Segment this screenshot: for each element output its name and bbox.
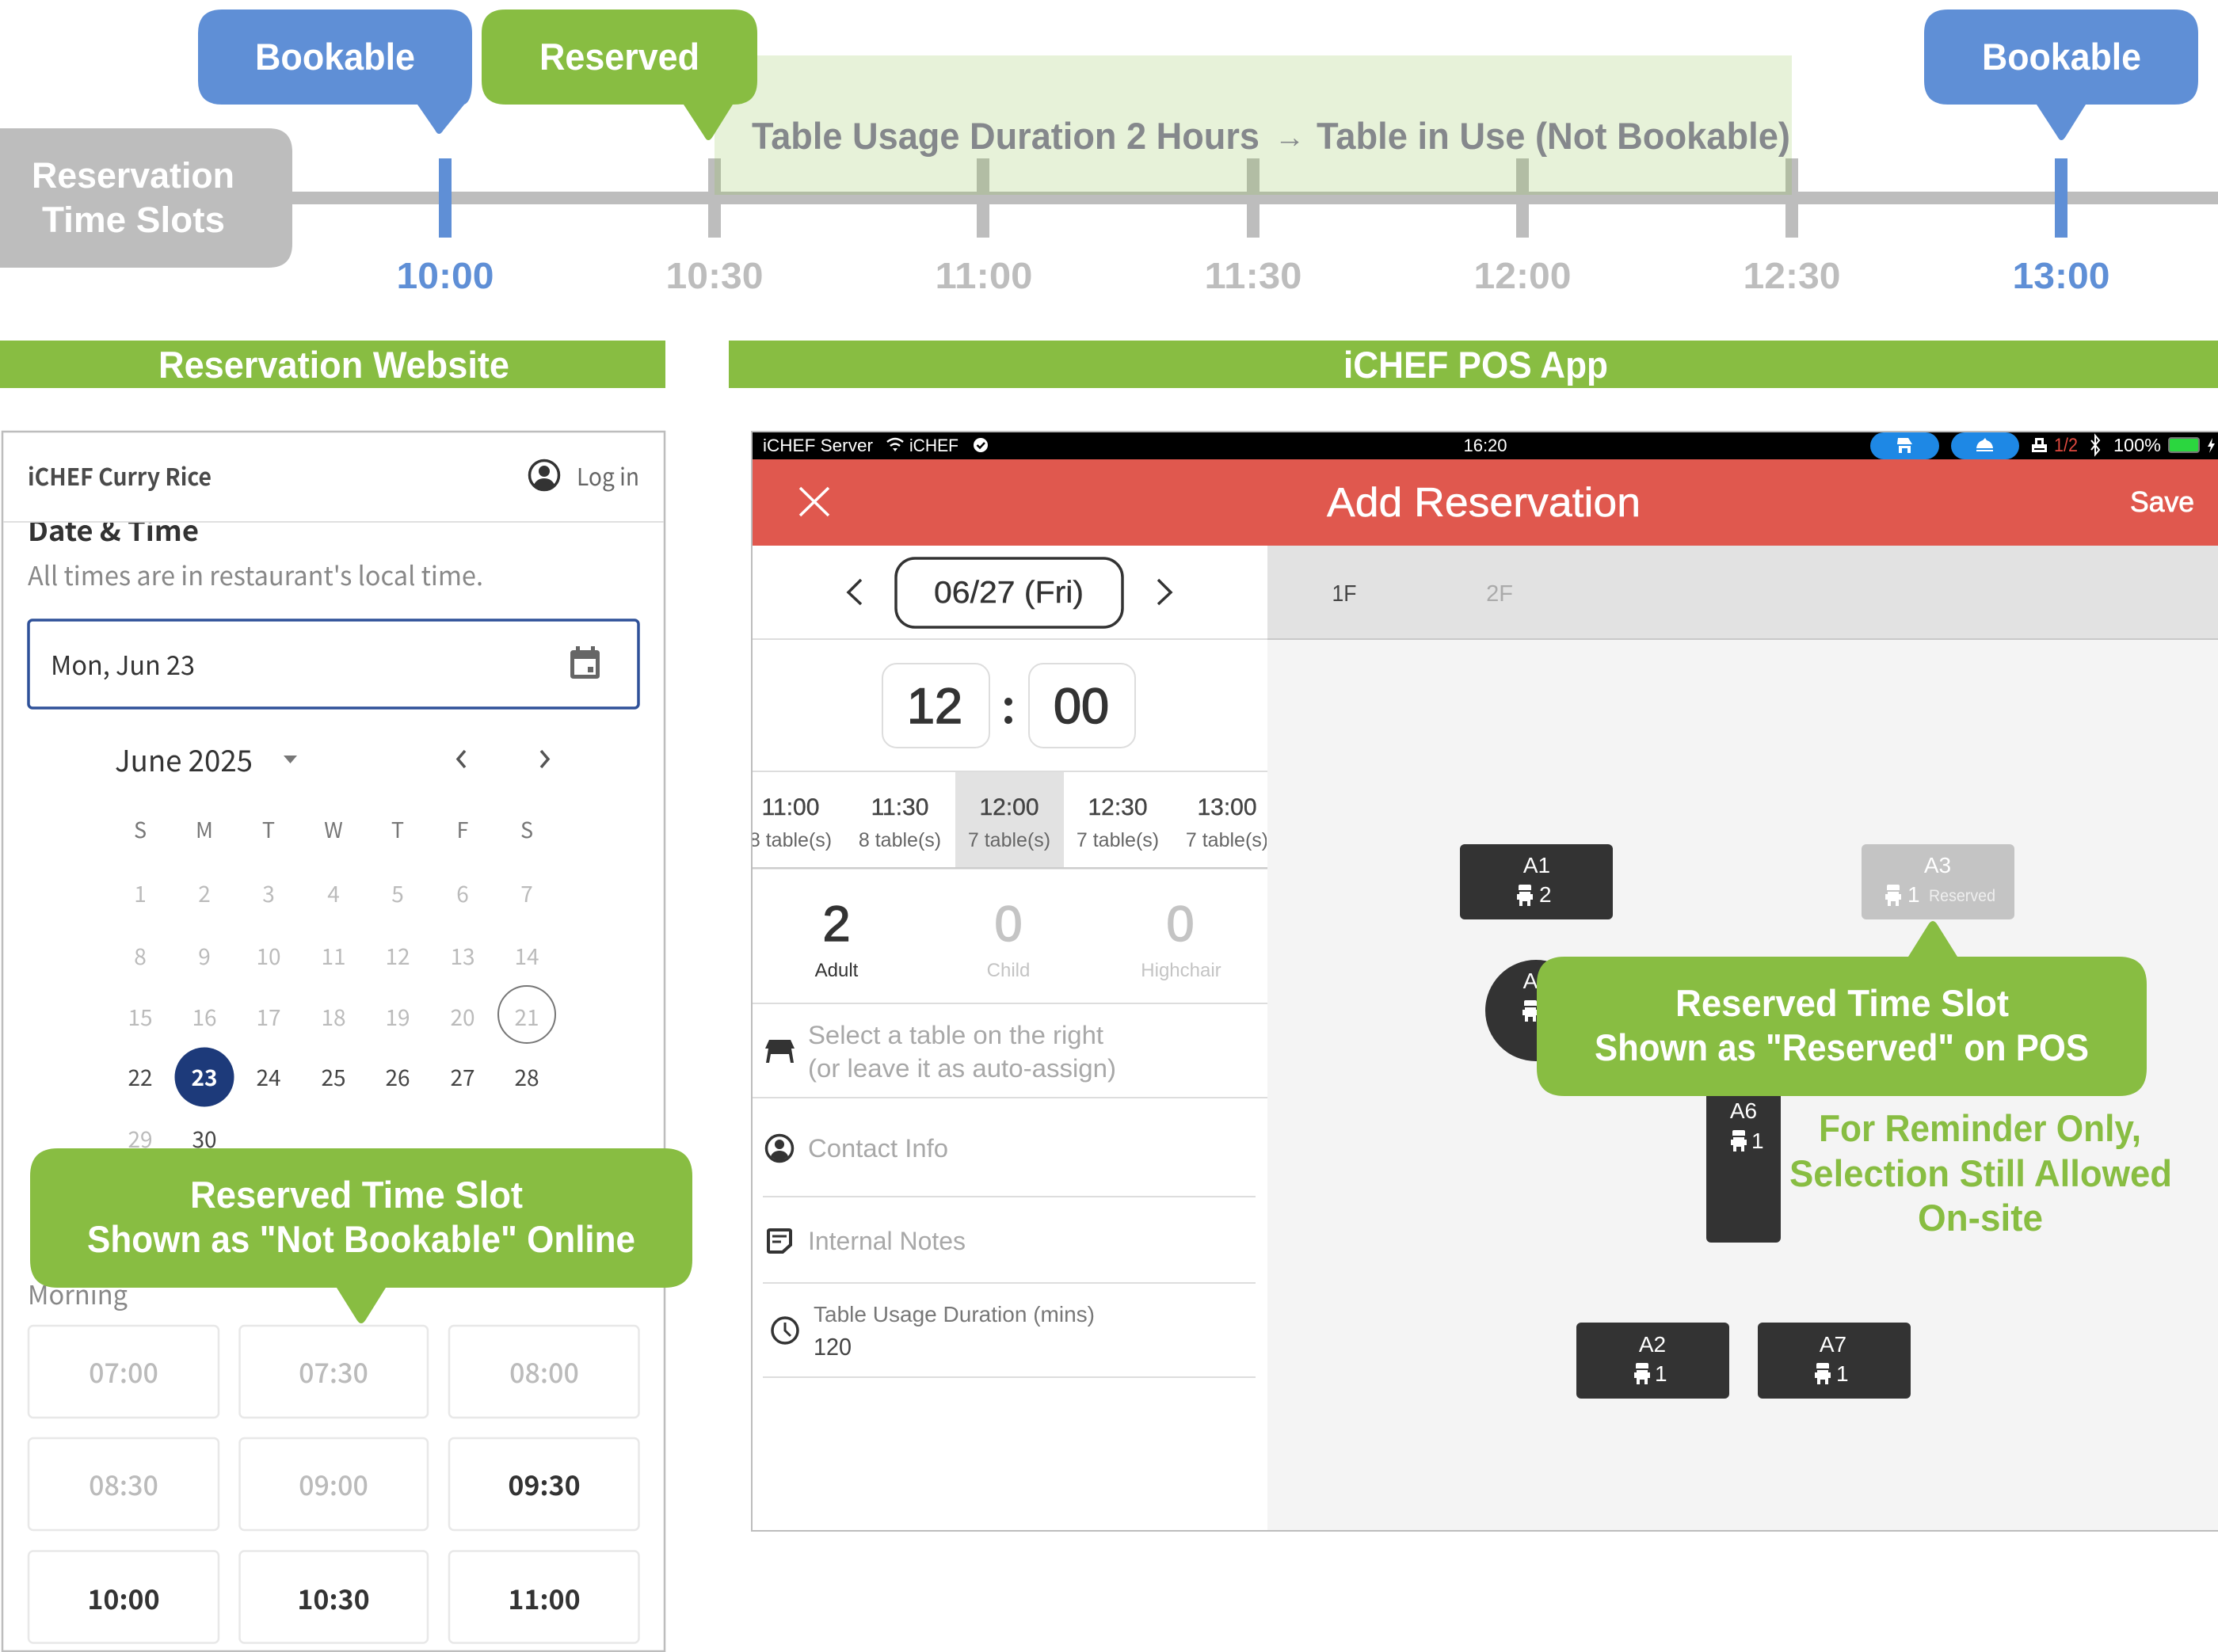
table usage duration band: Table in Use (Not Bookable) — [1317, 115, 1790, 157]
calendar: 30 — [192, 1123, 217, 1155]
table A6 — [1706, 1085, 1781, 1243]
callout: bookable 13:00 — [1924, 10, 2198, 140]
calendar: 25 — [321, 1061, 346, 1093]
time slot table counts: 7 table(s) — [1186, 829, 1268, 851]
callout: not bookable online: Reserved Time Slot — [190, 1174, 523, 1216]
time slot buttons: 11:00 — [508, 1578, 581, 1617]
callout: reserved on POS — [1537, 921, 2147, 1096]
time slot buttons: 08:30 — [89, 1464, 158, 1503]
date input: Mon, Jun 23 — [51, 645, 195, 683]
table round A — [1485, 960, 1587, 1061]
time slot table counts: 7 table(s) — [968, 829, 1050, 851]
heading: reservation website — [0, 341, 665, 388]
date and time heading — [28, 523, 482, 586]
date and time heading: Date & Time — [28, 509, 199, 550]
time slot buttons: 07:00 — [89, 1352, 158, 1391]
time slot buttons: 09:00 — [299, 1464, 368, 1503]
table A3 reserved: 1 — [1907, 882, 1920, 907]
calendar: M — [196, 813, 213, 844]
calendar: 29 — [128, 1123, 153, 1155]
calendar: 4 — [327, 877, 340, 909]
table A7: 1 — [1836, 1361, 1849, 1386]
table selection row — [753, 1021, 1267, 1098]
calendar: 18 — [321, 1001, 346, 1033]
note: for reminder only: Selection Still Allowed — [1789, 1152, 2172, 1194]
note: for reminder only: On-site — [1918, 1197, 2043, 1239]
calendar: 11 — [321, 940, 346, 972]
table usage duration row — [763, 1302, 1256, 1378]
calendar: 17 — [256, 1001, 281, 1033]
table A3 reserved: Reserved — [1929, 887, 1995, 905]
internal notes row: Internal Notes — [808, 1227, 966, 1255]
table A1: 2 — [1539, 882, 1552, 907]
callout: not bookable online — [30, 1148, 692, 1323]
party size: 2 — [822, 896, 851, 952]
time slot table counts: 12:00 — [979, 794, 1039, 820]
table A2: A2 — [1639, 1332, 1666, 1357]
time labels — [396, 255, 2110, 296]
time slot buttons: 09:30 — [508, 1464, 581, 1503]
time slot buttons: 10:30 — [297, 1578, 370, 1617]
heading: reservation website: Reservation Website — [158, 344, 509, 386]
time slot buttons: 08:00 — [509, 1352, 579, 1391]
table A1 — [1460, 844, 1613, 919]
red title bar — [753, 459, 2218, 546]
status bar: 16:20 — [1463, 436, 1507, 455]
time selector — [882, 664, 1135, 748]
calendar: 26 — [385, 1061, 410, 1093]
callout: reserved 10:30: Reserved — [539, 36, 699, 78]
time slot buttons — [29, 1326, 638, 1642]
party size: Child — [987, 960, 1030, 981]
calendar: 24 — [256, 1061, 281, 1093]
table usage duration row: Table Usage Duration (mins) — [814, 1302, 1095, 1327]
calendar: 2 — [198, 877, 211, 909]
label: reservation time slots — [0, 128, 292, 268]
calendar: 5 — [391, 877, 404, 909]
calendar: 8 — [134, 940, 147, 972]
heading: iCHEF POS app — [729, 341, 2218, 388]
date selector — [753, 558, 1267, 640]
website header — [3, 458, 664, 523]
heading: iCHEF POS app: iCHEF POS App — [1343, 344, 1608, 386]
time selector: 00 — [1054, 679, 1109, 734]
status bar — [753, 432, 2218, 459]
time slot buttons: 10:00 — [87, 1578, 160, 1617]
callout: bookable 10:00 — [198, 10, 472, 134]
calendar: June 2025 — [115, 737, 253, 780]
internal notes row — [763, 1227, 1256, 1284]
calendar: 14 — [514, 940, 539, 972]
table A6: 1 — [1751, 1129, 1764, 1153]
time labels: 12:00 — [1473, 255, 1572, 296]
time slot table counts: 12:30 — [1088, 794, 1148, 820]
party size: Adult — [815, 960, 859, 981]
table A3 reserved — [1862, 844, 2014, 919]
red title bar: Save — [2130, 485, 2194, 518]
label: reservation time slots: Time Slots — [42, 200, 225, 240]
calendar: 9 — [198, 940, 211, 972]
callout: reserved on POS: Shown as "Reserved" on POS — [1595, 1026, 2089, 1068]
time slot table counts: 11:30 — [871, 794, 928, 820]
table round A: A — [1523, 969, 1538, 993]
date input — [29, 620, 638, 708]
timeline: reservation time slots — [292, 158, 2218, 296]
date and time heading: All times are in restaurant's local time. — [28, 555, 483, 593]
calendar: 20 — [450, 1001, 475, 1033]
red title bar: Add Reservation — [1327, 480, 1641, 526]
morning label: Morning — [28, 1274, 128, 1312]
calendar: 10 — [256, 940, 281, 972]
party size: 0 — [1166, 896, 1195, 952]
status bar: iCHEF Server — [763, 436, 873, 455]
callout: bookable 13:00: Bookable — [1982, 36, 2141, 78]
calendar: 12 — [385, 940, 410, 972]
calendar: 27 — [450, 1061, 475, 1093]
time slot table counts: 11:00 — [762, 794, 819, 820]
party size — [753, 896, 1267, 1004]
calendar: W — [324, 813, 343, 844]
table selection row: Select a table on the right — [808, 1021, 1103, 1049]
calendar: 23 — [191, 1061, 218, 1093]
calendar: 15 — [128, 1001, 153, 1033]
time selector: 12 — [907, 679, 962, 734]
party size: Highchair — [1141, 960, 1221, 981]
panel: iCHEF POS app — [749, 432, 2218, 1531]
note: for reminder only: For Reminder Only, — [1819, 1107, 2141, 1149]
calendar — [115, 737, 555, 1155]
panel: reservation website — [2, 432, 665, 1651]
contact info row — [763, 1134, 1256, 1197]
calendar: 19 — [385, 1001, 410, 1033]
calendar: 22 — [128, 1061, 153, 1093]
calendar: 28 — [514, 1061, 539, 1093]
table A3 reserved: A3 — [1924, 853, 1951, 877]
calendar: 7 — [520, 877, 533, 909]
floor tabs: 1F — [1332, 581, 1356, 607]
website header: iCHEF Curry Rice — [28, 458, 212, 493]
time slot table counts — [749, 771, 1268, 870]
time slot table counts: 13:00 — [1197, 794, 1257, 820]
floor tabs: 2F — [1486, 581, 1513, 607]
callout: not bookable online: Shown as "Not Bookable" Online — [87, 1218, 635, 1260]
calendar: F — [457, 813, 469, 844]
calendar: S — [134, 813, 147, 844]
time slot table counts: 8 table(s) — [749, 829, 832, 851]
website header: Log in — [577, 458, 639, 493]
label: reservation time slots: Reservation — [32, 155, 234, 196]
calendar: S — [520, 813, 533, 844]
calendar: 16 — [192, 1001, 217, 1033]
date selector: 06/27 (Fri) — [934, 576, 1084, 610]
callout: reserved on POS: Reserved Time Slot — [1675, 982, 2009, 1024]
time slot buttons: 07:30 — [299, 1352, 368, 1391]
time slot table counts: 8 table(s) — [859, 829, 941, 851]
time labels: 13:00 — [2012, 255, 2110, 296]
table A7: A7 — [1820, 1332, 1846, 1357]
table A2: 1 — [1655, 1361, 1667, 1386]
callout: reserved 10:30 — [482, 10, 757, 140]
table usage duration band — [715, 55, 1792, 195]
calendar: 21 — [514, 1001, 539, 1033]
calendar: 13 — [450, 940, 475, 972]
table usage duration band: → — [1275, 121, 1305, 154]
calendar: 6 — [456, 877, 469, 909]
floor tabs — [1267, 546, 2218, 640]
calendar: T — [391, 813, 404, 844]
status bar: 100% — [2113, 435, 2161, 455]
calendar: 1 — [134, 877, 147, 909]
note: for reminder only — [1789, 1107, 2172, 1239]
time labels: 10:30 — [665, 255, 764, 296]
table usage duration band: Table Usage Duration 2 Hours — [752, 115, 1260, 157]
table selection row: (or leave it as auto-assign) — [808, 1054, 1116, 1083]
status bar: iCHEF — [909, 436, 958, 455]
table A1: A1 — [1523, 853, 1550, 877]
calendar: T — [262, 813, 275, 844]
calendar: 3 — [262, 877, 275, 909]
status bar: 1/2 — [2054, 435, 2078, 456]
time labels: 12:30 — [1743, 255, 1841, 296]
time labels: 11:30 — [1204, 255, 1302, 296]
table usage duration row: 120 — [814, 1333, 852, 1361]
floor plan background — [1267, 639, 2218, 1530]
table A2 — [1576, 1323, 1729, 1399]
callout: bookable 10:00: Bookable — [255, 36, 415, 78]
time labels: 10:00 — [396, 255, 494, 296]
time slot table counts: 7 table(s) — [1077, 829, 1159, 851]
table A7 — [1758, 1323, 1911, 1399]
party size: 0 — [994, 896, 1023, 952]
contact info row: Contact Info — [808, 1134, 948, 1163]
time labels: 11:00 — [935, 255, 1033, 296]
table A6: A6 — [1730, 1098, 1757, 1123]
